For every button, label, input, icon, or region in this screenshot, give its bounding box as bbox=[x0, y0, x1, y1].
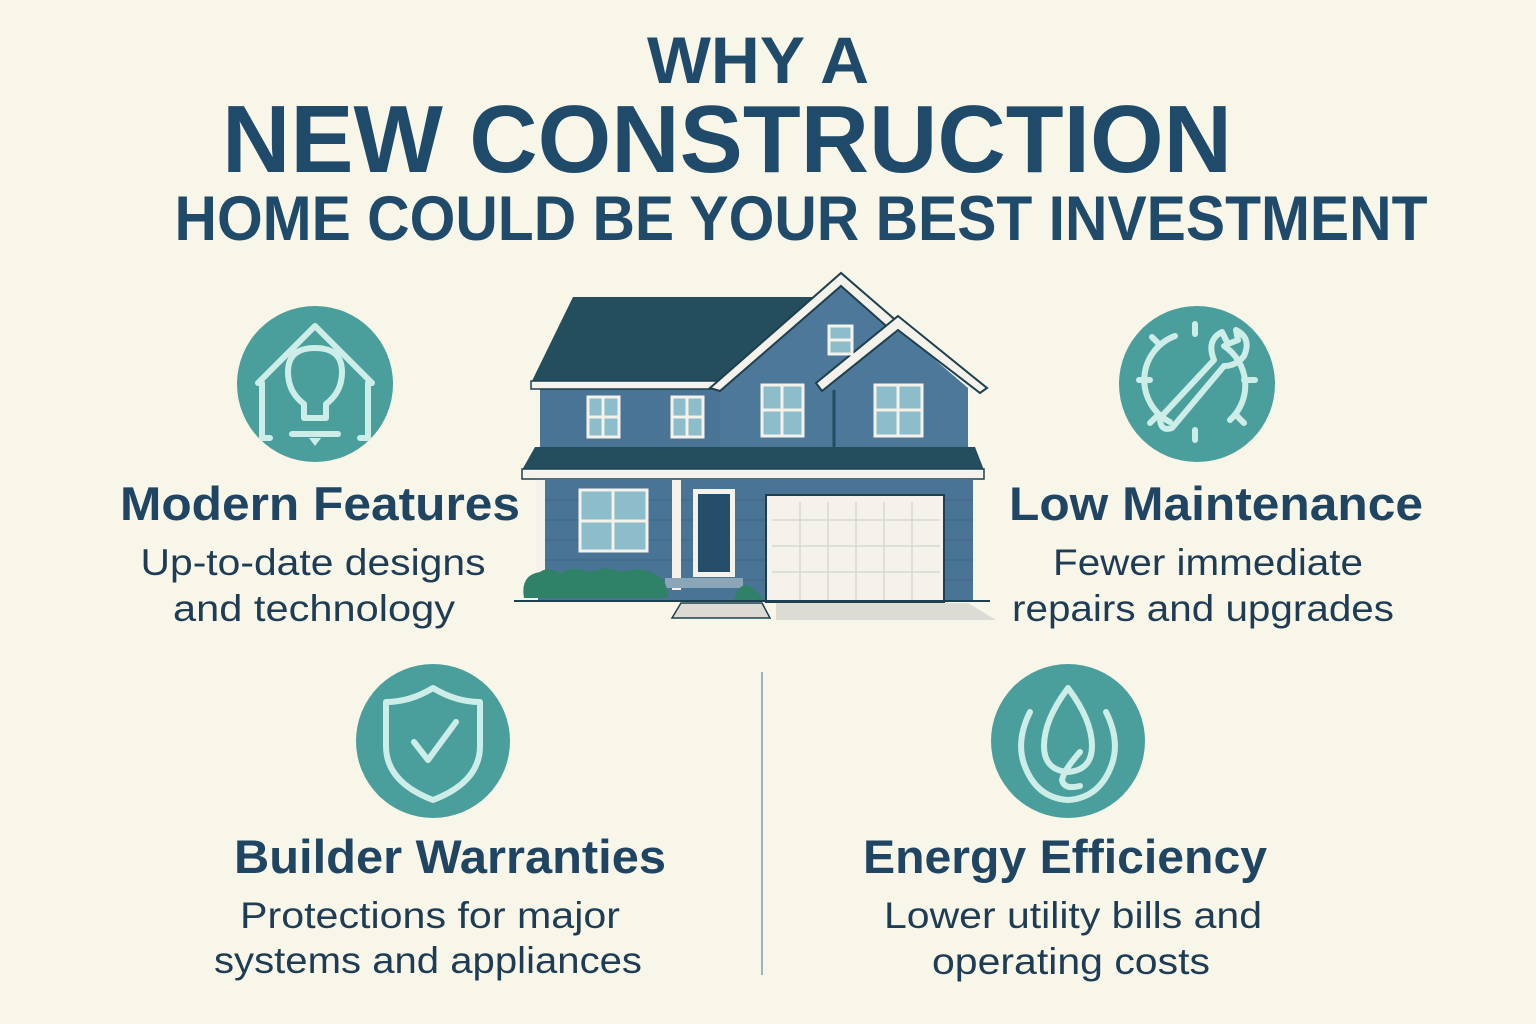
panel: modern features bbox=[120, 306, 520, 629]
divider bbox=[761, 672, 763, 975]
upper windows bbox=[588, 326, 922, 437]
title bbox=[174, 23, 1428, 254]
panel: modern features: Modern Features bbox=[120, 477, 520, 530]
icon: smart home bulb bbox=[237, 306, 393, 462]
panel: energy efficiency: Energy Efficiency bbox=[863, 830, 1267, 883]
title: HOME COULD BE YOUR BEST INVESTMENT bbox=[174, 184, 1428, 254]
panel: modern features: Up-to-date designs bbox=[140, 542, 486, 583]
house illustration bbox=[514, 273, 996, 620]
panel: low maintenance: Fewer immediate bbox=[1053, 542, 1363, 583]
icon: shield check bbox=[356, 664, 510, 818]
panel: builder warranties bbox=[214, 664, 666, 981]
panel: low maintenance bbox=[1009, 306, 1423, 629]
icon: drop leaf bbox=[991, 664, 1145, 818]
panel: energy efficiency: operating costs bbox=[932, 941, 1210, 982]
icon: gear and wrench bbox=[1119, 306, 1275, 462]
lower wall bbox=[538, 479, 973, 601]
lower roof bbox=[522, 447, 984, 470]
title: WHY A bbox=[647, 23, 869, 97]
panel: modern features: and technology bbox=[173, 588, 456, 629]
gable 2 bbox=[828, 328, 968, 448]
door bbox=[693, 489, 735, 577]
upper left wall bbox=[540, 386, 725, 448]
panel: builder warranties: Protections for major bbox=[240, 895, 620, 936]
bushes bbox=[523, 568, 668, 598]
lower window bbox=[580, 490, 647, 551]
main roof bbox=[531, 297, 820, 383]
panel: low maintenance: repairs and upgrades bbox=[1012, 588, 1394, 629]
garage bbox=[766, 495, 944, 602]
panel: energy efficiency bbox=[863, 664, 1267, 982]
panel: energy efficiency: Lower utility bills and bbox=[884, 895, 1262, 936]
title: NEW CONSTRUCTION bbox=[222, 86, 1232, 193]
panel: builder warranties: Builder Warranties bbox=[234, 830, 666, 883]
panel: builder warranties: systems and appliances bbox=[214, 940, 642, 981]
gable 1 wall bbox=[720, 283, 960, 448]
ground bbox=[514, 600, 990, 602]
panel: low maintenance: Low Maintenance bbox=[1009, 477, 1423, 530]
